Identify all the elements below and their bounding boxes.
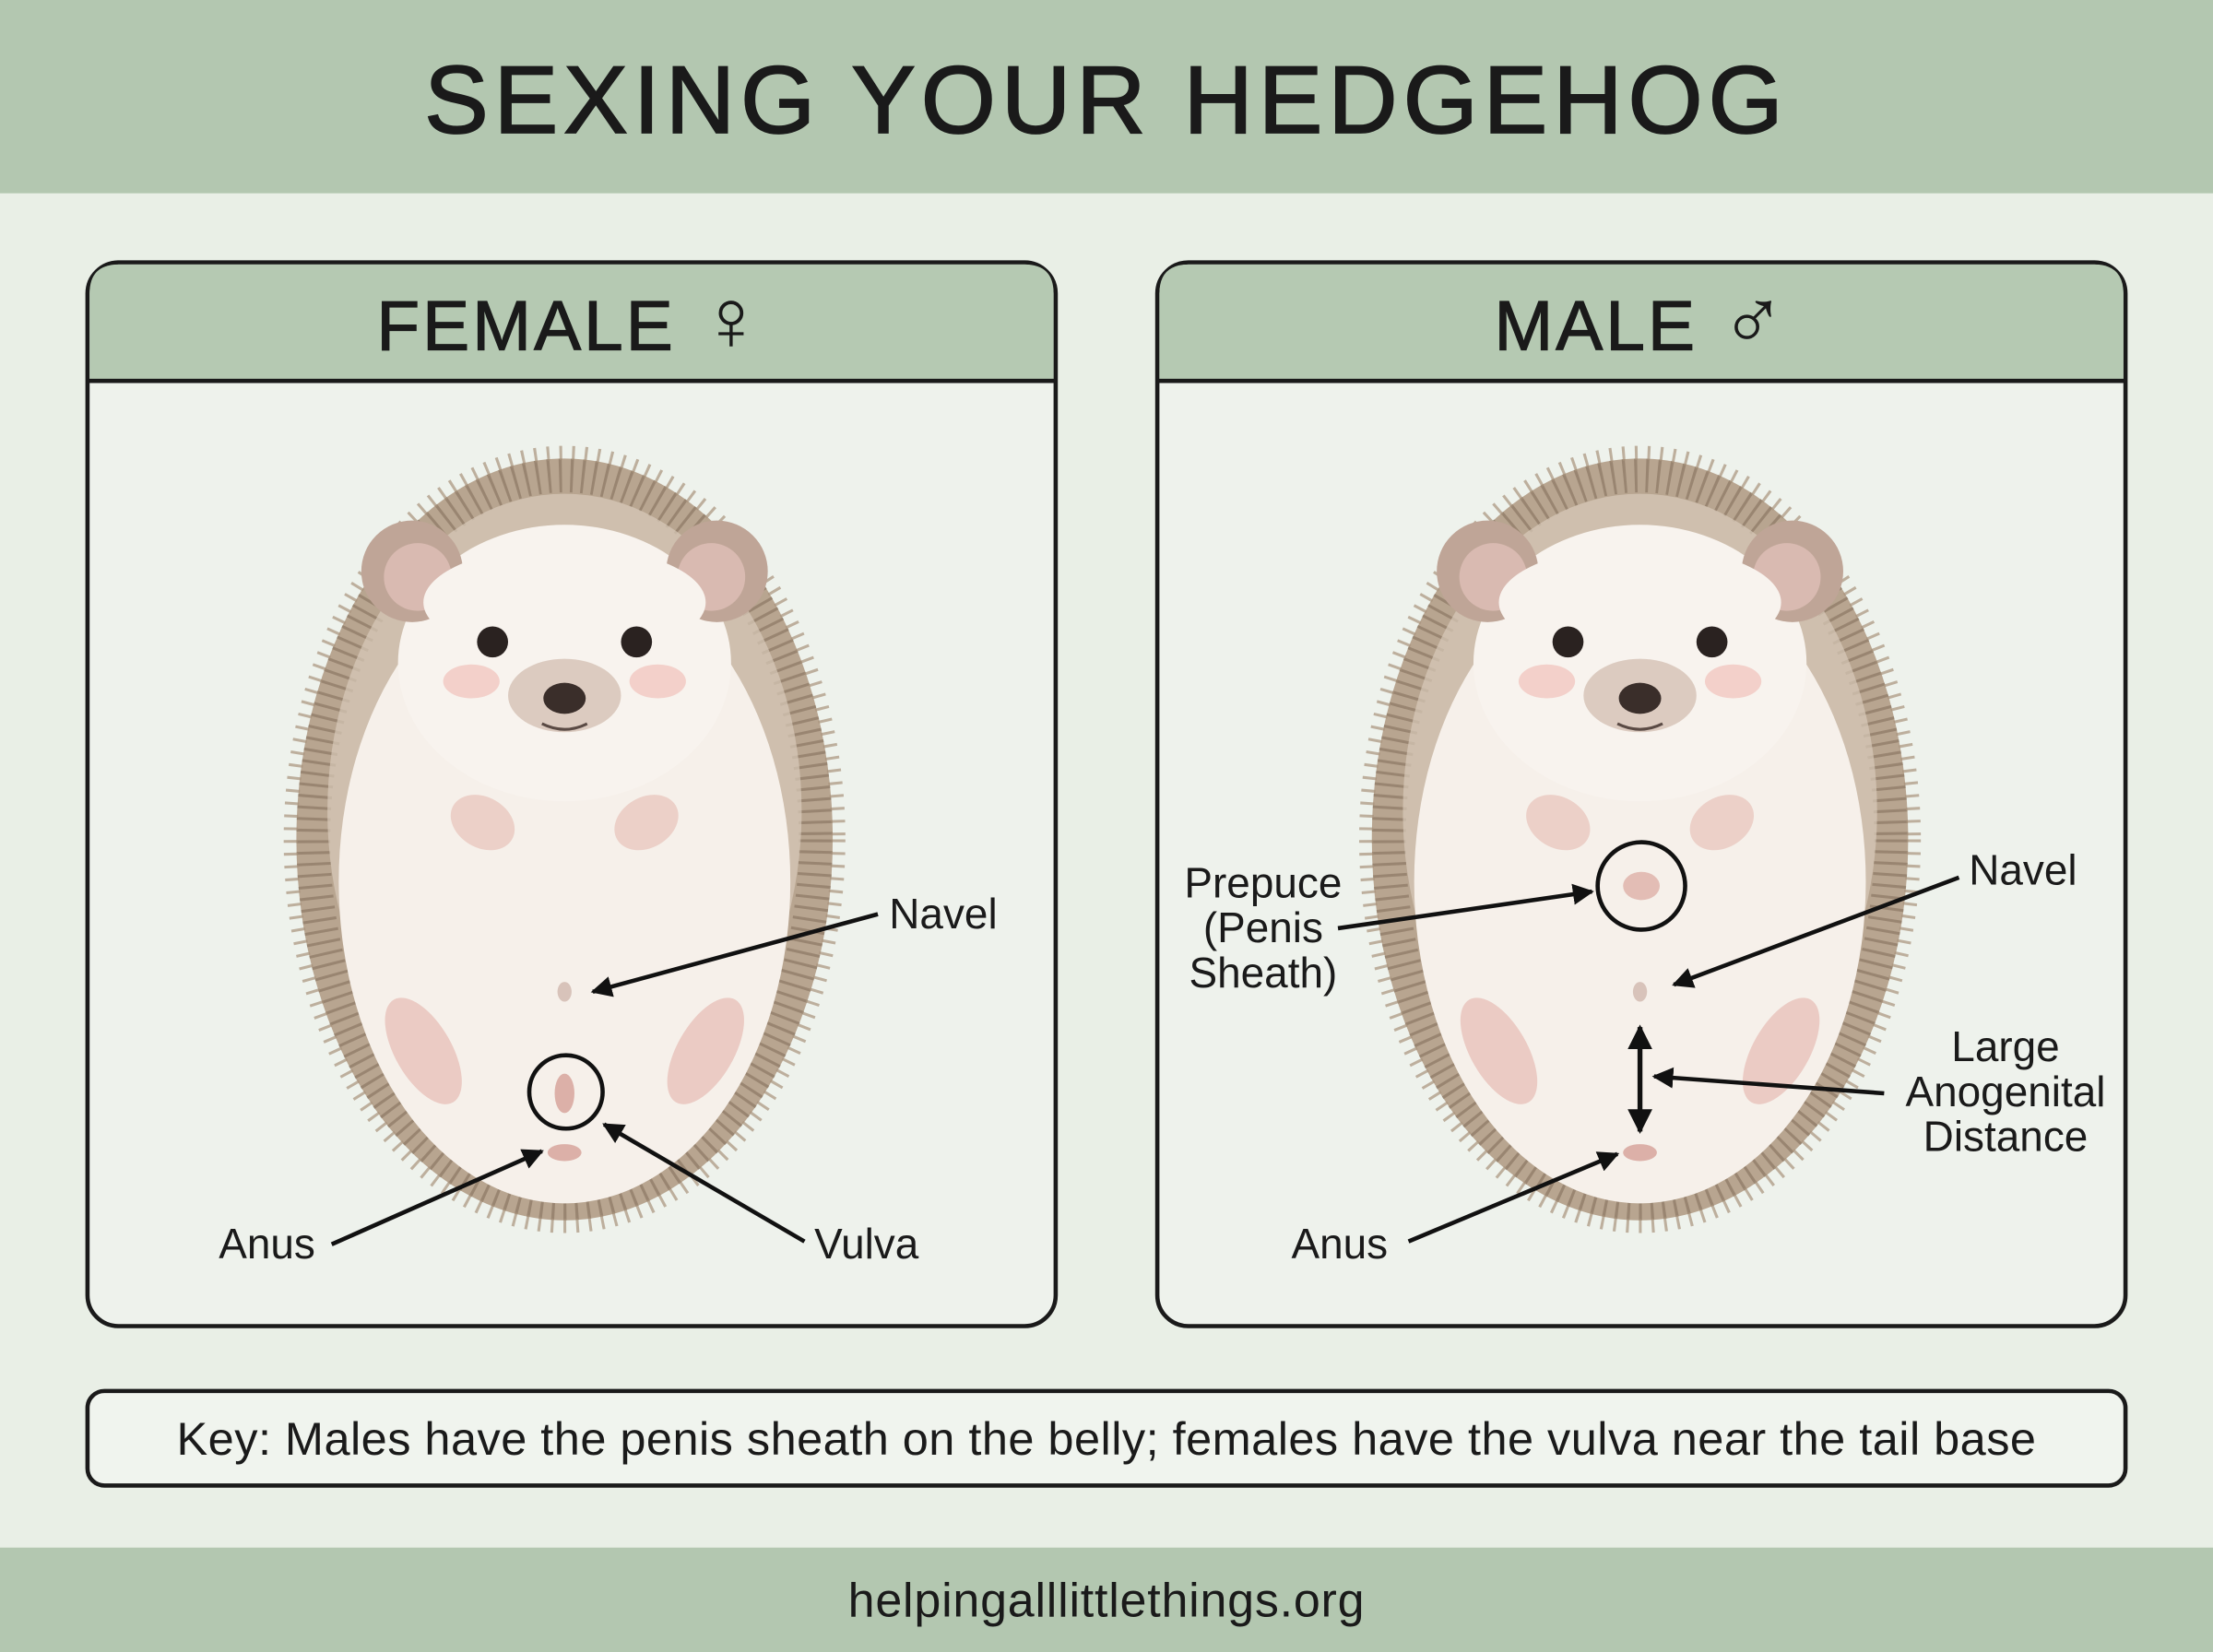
label: vulva: Vulva	[814, 1220, 919, 1268]
footer band: helpingalllittlethings.org	[848, 1575, 1365, 1628]
panel: female	[88, 263, 1056, 1326]
heading: female: FEMALE ♀	[376, 272, 766, 370]
label: large anogenital distance: Anogenital	[1906, 1068, 2105, 1115]
title: SEXING YOUR HEDGEHOG	[424, 47, 1789, 154]
heading: male: MALE ♂	[1495, 272, 1789, 370]
label: prepuce: Sheath)	[1189, 949, 1337, 997]
label: large anogenital distance: Large	[1951, 1022, 2060, 1070]
label: anus	[1292, 1154, 1617, 1268]
label: anus	[219, 1151, 542, 1268]
label: navel	[593, 890, 998, 992]
label: navel: Navel	[889, 890, 998, 938]
label: navel: Navel	[1969, 846, 2077, 894]
panel: male	[1157, 263, 2125, 1326]
label: large anogenital distance: Distance	[1923, 1113, 2088, 1161]
label: anus: Anus	[1292, 1220, 1388, 1268]
label: anus: Anus	[219, 1220, 315, 1268]
callout: vulva circle	[529, 1056, 603, 1128]
illustration: female hedgehog	[290, 453, 838, 1226]
arrow: anogenital distance	[1639, 1027, 1641, 1131]
label: large anogenital distance	[1654, 1022, 2105, 1161]
key box: Key: Males have the penis sheath on the belly; females have the vulva near the tail base	[177, 1412, 2036, 1465]
label: navel	[1674, 846, 2077, 985]
footer band	[0, 1548, 2213, 1652]
label: prepuce	[1184, 858, 1592, 997]
label: prepuce: (Penis	[1203, 903, 1323, 951]
label: prepuce: Prepuce	[1184, 858, 1342, 906]
callout: prepuce circle	[1598, 843, 1686, 929]
label: vulva	[604, 1125, 919, 1268]
key box	[88, 1391, 2125, 1485]
illustration: male hedgehog	[1367, 453, 1914, 1226]
header band	[0, 0, 2213, 194]
